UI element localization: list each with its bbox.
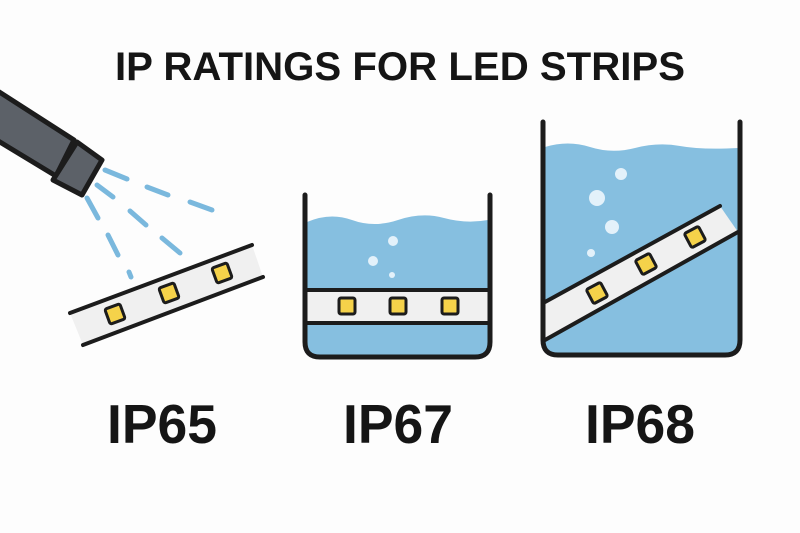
label: IP67: IP67: [343, 393, 453, 455]
label: IP68: IP68: [585, 393, 695, 455]
beaker: IP68: [543, 122, 740, 355]
icon: hose nozzle: [0, 86, 102, 195]
title: IP RATINGS FOR LED STRIPS: [115, 45, 685, 89]
strip: IP65: [70, 245, 263, 345]
beaker: IP67: [305, 195, 490, 357]
spray: water jets: [87, 170, 212, 277]
label: IP65: IP65: [107, 393, 217, 455]
